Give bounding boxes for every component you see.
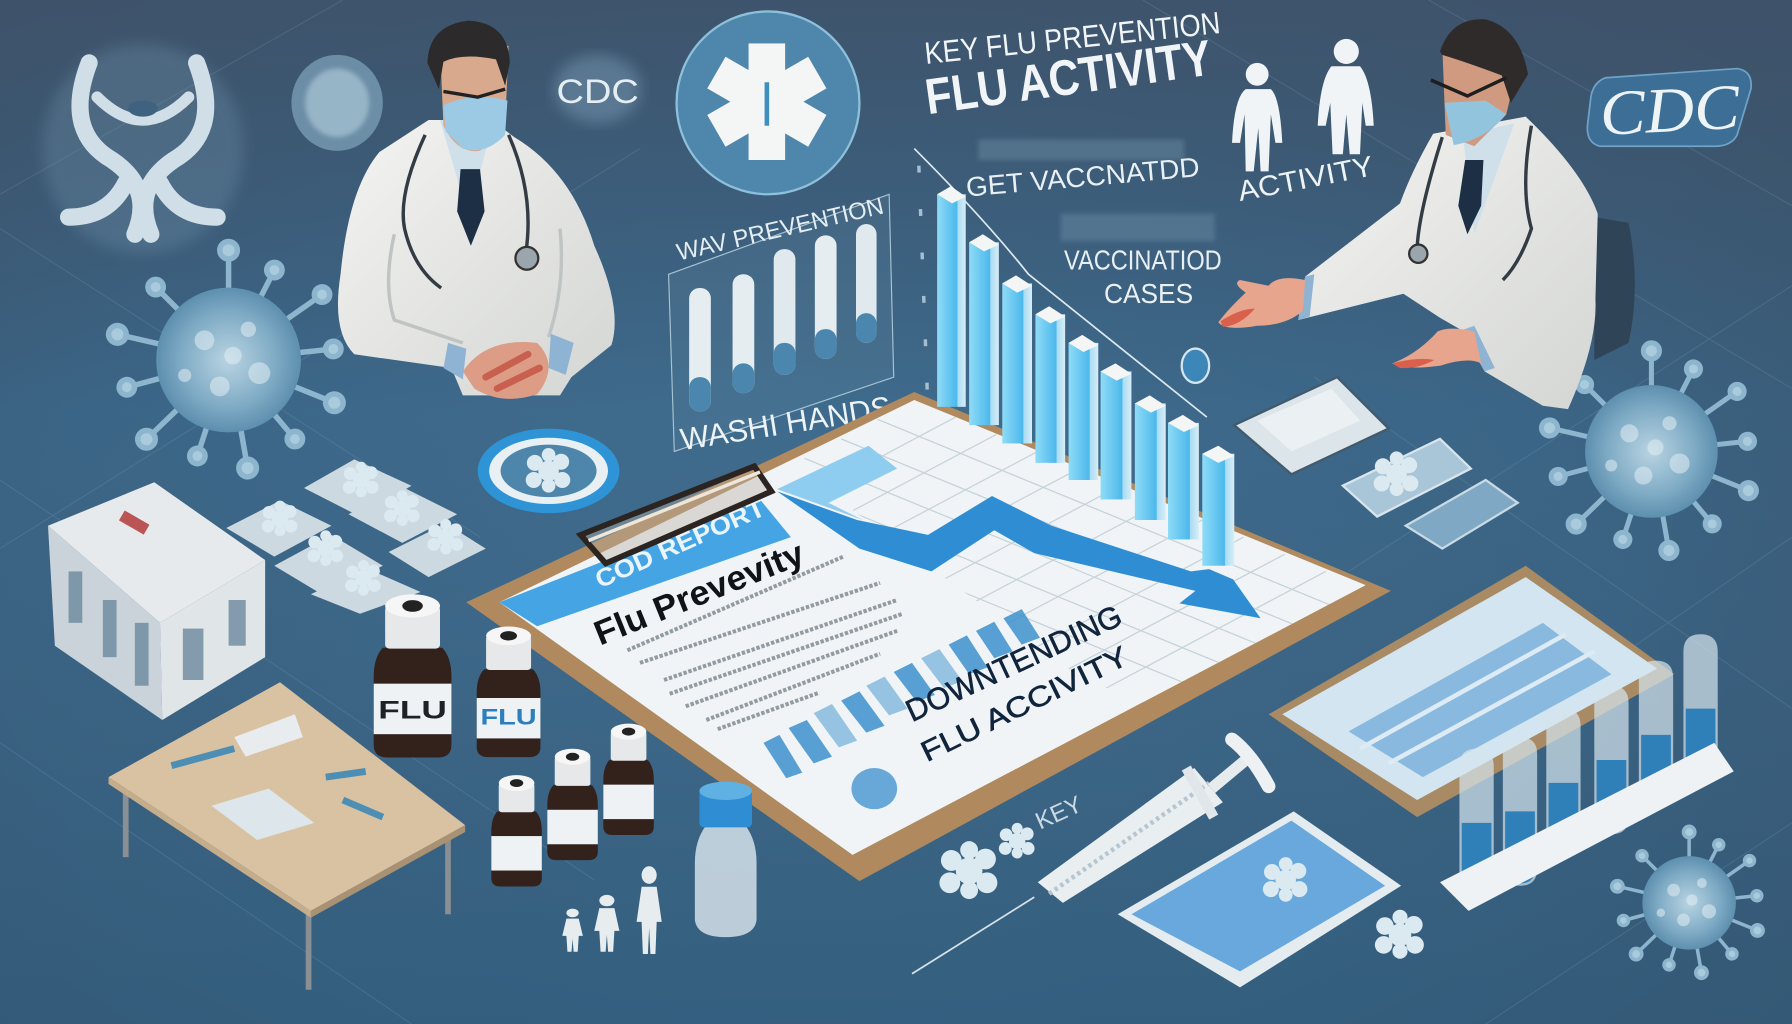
label: vaccinated cases: CASES	[1104, 278, 1193, 309]
report header	[499, 494, 791, 626]
vial: flu large: FLU	[378, 696, 447, 724]
panel: wash hands: WASHI HANDS	[678, 389, 893, 457]
virus bottom right	[1611, 826, 1765, 979]
panel: wash hands	[669, 193, 894, 457]
snow flakes	[939, 823, 1424, 959]
bar chart	[914, 149, 1234, 566]
blue card	[1118, 811, 1401, 987]
tube rack	[1440, 634, 1734, 911]
paper	[499, 400, 1366, 855]
table	[109, 682, 465, 990]
clip	[581, 466, 771, 563]
label: vaccinated cases	[1064, 245, 1222, 309]
report body text	[627, 557, 903, 729]
head	[427, 21, 510, 151]
vials	[374, 594, 654, 886]
vial: flu blue: FLU	[480, 705, 537, 730]
tiny people	[562, 866, 662, 954]
clipboard	[466, 392, 1391, 881]
title: FLU ACTIVITY	[922, 29, 1215, 125]
clipboard right	[1269, 566, 1674, 817]
icon: biohazard symbol	[42, 43, 243, 254]
round badge	[478, 429, 619, 513]
doctor right	[1218, 19, 1598, 409]
virus right	[1540, 343, 1759, 560]
blister packs	[226, 459, 486, 614]
report label: downtrending flu activity: FLU ACCIVITY	[916, 641, 1133, 769]
boxes	[48, 482, 265, 720]
doctor left	[338, 21, 615, 399]
chair	[1594, 217, 1635, 360]
CDC logo: CDC	[1598, 71, 1742, 149]
icon: people	[1232, 39, 1374, 171]
report label: downtrending flu activity: DOWNTENDING	[900, 598, 1127, 729]
label: vaccinated cases: VACCINATIOD	[1064, 245, 1222, 276]
CDC badge left: CDC	[557, 73, 639, 111]
vial: flu blue	[477, 627, 540, 757]
clear bottle	[695, 782, 757, 937]
hands	[463, 342, 549, 399]
hands	[1218, 278, 1481, 368]
title: KEY FLU PREVENTION	[923, 5, 1222, 71]
head	[1431, 19, 1528, 146]
report title: Flu Prevevity	[589, 534, 810, 653]
small badge	[1182, 349, 1209, 383]
report header: COD REPORT	[591, 494, 770, 594]
report emblem	[851, 768, 897, 809]
downtrend arrow	[777, 446, 1261, 618]
label: get vaccinated: GET VACCNATDD	[965, 151, 1201, 203]
syringe	[912, 739, 1269, 974]
mini bars on report	[763, 609, 1040, 778]
CDC badge left	[554, 55, 641, 123]
icon: star of life	[677, 11, 859, 194]
icon: blurred virus blob	[291, 55, 383, 151]
vial: flu large	[374, 594, 451, 757]
label: activity: ACTIVITY	[1235, 150, 1376, 208]
panel: wash hands: WAV PREVENTION	[674, 193, 886, 266]
smudged text	[978, 139, 1215, 241]
virus left	[107, 242, 346, 478]
axis ticks	[919, 166, 928, 411]
label: key: KEY	[1031, 791, 1086, 835]
sample trays	[1234, 377, 1518, 549]
